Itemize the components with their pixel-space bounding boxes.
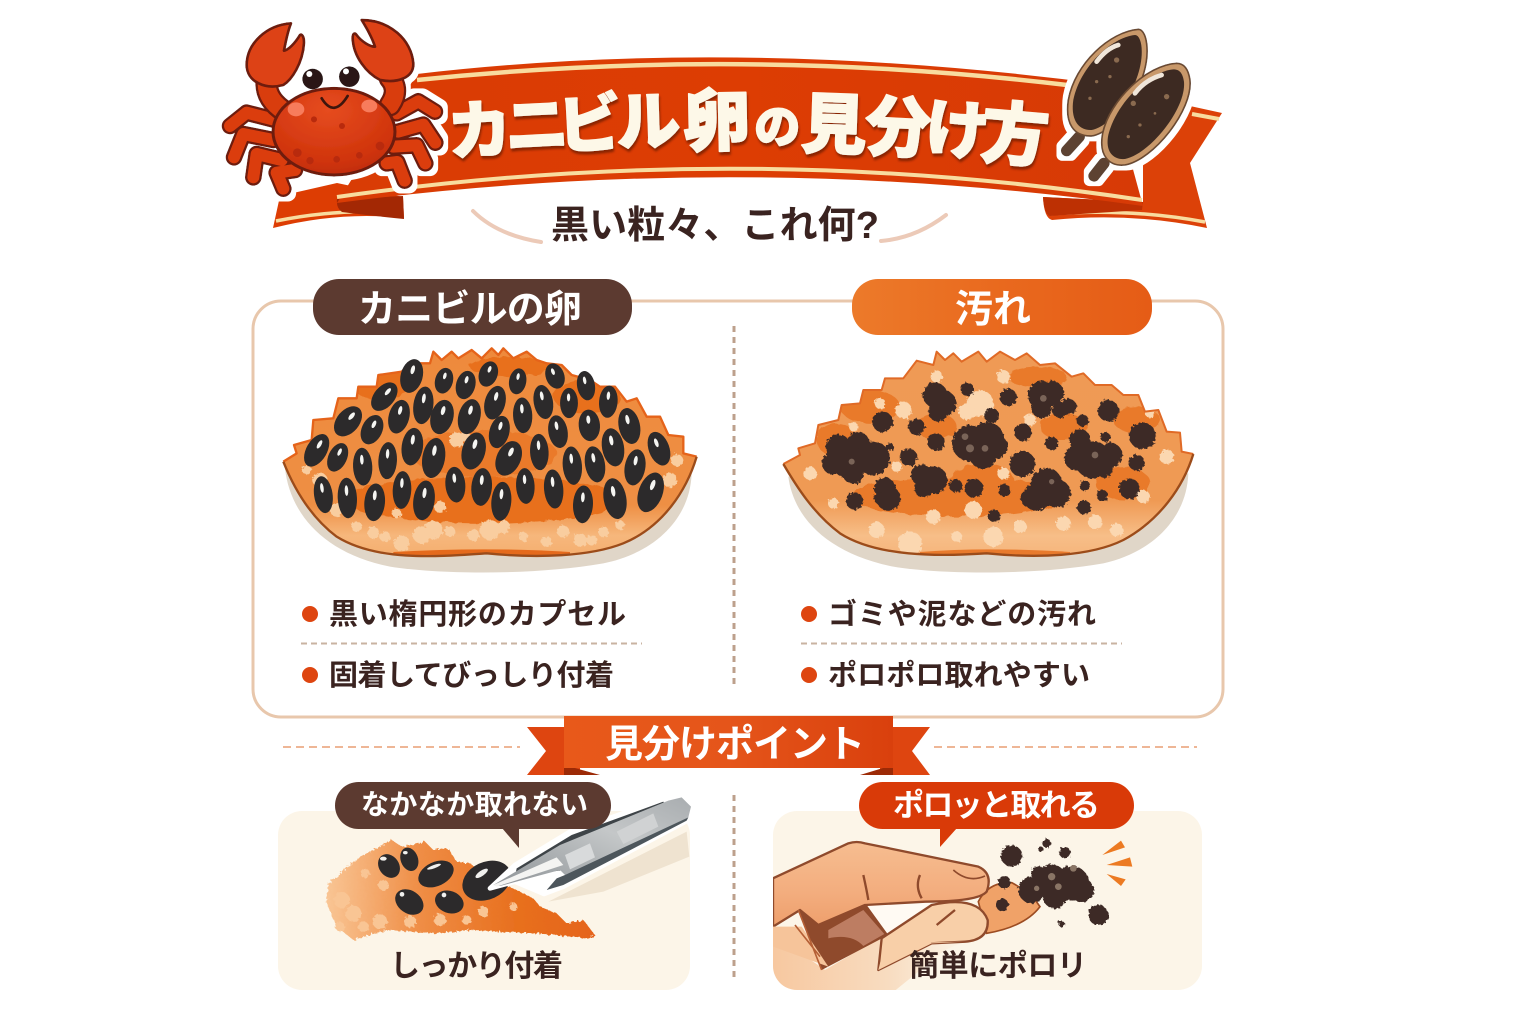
bullet list: egg features xyxy=(301,598,642,692)
title text: 見 xyxy=(800,87,868,163)
title text: 卵 xyxy=(682,83,751,161)
title text xyxy=(446,83,1052,177)
title ribbon xyxy=(273,57,1222,228)
shell piece held xyxy=(978,883,1040,933)
crab arms xyxy=(267,78,395,112)
shell base xyxy=(280,347,700,567)
heading: 汚れ: 汚れ xyxy=(955,289,1031,331)
black egg capsules xyxy=(299,357,675,524)
ribbon left tail xyxy=(273,183,404,228)
shadow under palm xyxy=(798,905,888,970)
bullet list: egg features: 固着してびっしり付着 xyxy=(329,659,614,692)
title text: 分 xyxy=(863,89,933,167)
subtitle xyxy=(473,205,946,247)
title text: の xyxy=(754,101,801,153)
egg capsules xyxy=(374,845,518,920)
callout: なかなか取れない xyxy=(335,782,611,848)
banner: 見分けポイント xyxy=(527,716,930,775)
panel: tweezers example xyxy=(278,811,690,990)
shell outline xyxy=(783,352,1193,556)
icon: crab xyxy=(230,20,435,189)
caption: しっかり付着: しっかり付着 xyxy=(390,950,563,983)
bullet list: dirt features: ポロポロ取れやすい xyxy=(828,659,1090,692)
heading: 汚れ xyxy=(852,279,1152,335)
crab body xyxy=(273,88,395,175)
thumb xyxy=(878,902,988,970)
capsule front xyxy=(1094,63,1190,176)
bullet list: egg features: 黒い楕円形のカプセル xyxy=(329,598,626,631)
bullet list: dirt features xyxy=(801,597,1122,692)
illustration: tweezers on shell fragment xyxy=(327,796,693,940)
crab smile xyxy=(322,96,348,108)
title text: 方 xyxy=(978,95,1052,177)
bullet list: dirt features: ゴミや泥などの汚れ xyxy=(828,597,1096,631)
callout: ポロッと取れる: ポロッと取れる xyxy=(893,788,1100,823)
caption: 簡単にポロリ: 簡単にポロリ xyxy=(909,950,1087,983)
shell shadow xyxy=(285,468,692,573)
dirt clumps xyxy=(823,382,1154,521)
ribbon right tail xyxy=(1043,106,1222,228)
title text: ビ xyxy=(556,87,624,163)
banner: 見分けポイント: 見分けポイント xyxy=(605,724,865,766)
crab claws xyxy=(247,20,413,86)
callout: なかなか取れない: なかなか取れない xyxy=(361,789,588,820)
illustration: crab shell with eggs xyxy=(280,347,700,573)
title text: ニ xyxy=(503,88,571,164)
icon: two seed capsules xyxy=(1067,29,1190,176)
tweezers shadow xyxy=(548,832,689,902)
shell outline xyxy=(283,348,697,556)
subtitle text: 黒い粒々、これ何? xyxy=(551,205,879,247)
panel: comparison xyxy=(253,301,1223,717)
heading: カニビルの卵: カニビルの卵 xyxy=(358,289,582,331)
illustration: fingers crumbling dirt xyxy=(773,840,1132,993)
ribbon main band xyxy=(337,57,1143,206)
dirt falling off xyxy=(997,840,1107,926)
hand xyxy=(773,842,1040,993)
lower hand fade xyxy=(773,939,950,990)
title text: カ xyxy=(446,93,514,169)
shell shadow xyxy=(788,473,1188,573)
callout: ポロッと取れる xyxy=(859,782,1134,847)
shell fragment xyxy=(327,840,595,940)
title text: ル xyxy=(615,85,681,159)
gap between fingers xyxy=(868,903,930,933)
burst lines xyxy=(1102,841,1132,886)
crab legs xyxy=(230,101,435,189)
panel: finger example xyxy=(773,811,1202,990)
shell base xyxy=(784,353,1192,555)
heading: カニビルの卵 xyxy=(313,279,632,335)
back of hand and index finger xyxy=(773,842,989,927)
illustration: crab shell with dirt xyxy=(780,347,1200,573)
title text: け xyxy=(923,93,992,169)
tweezers xyxy=(490,796,693,894)
crab eyes xyxy=(302,66,360,89)
capsule back xyxy=(1067,29,1147,151)
